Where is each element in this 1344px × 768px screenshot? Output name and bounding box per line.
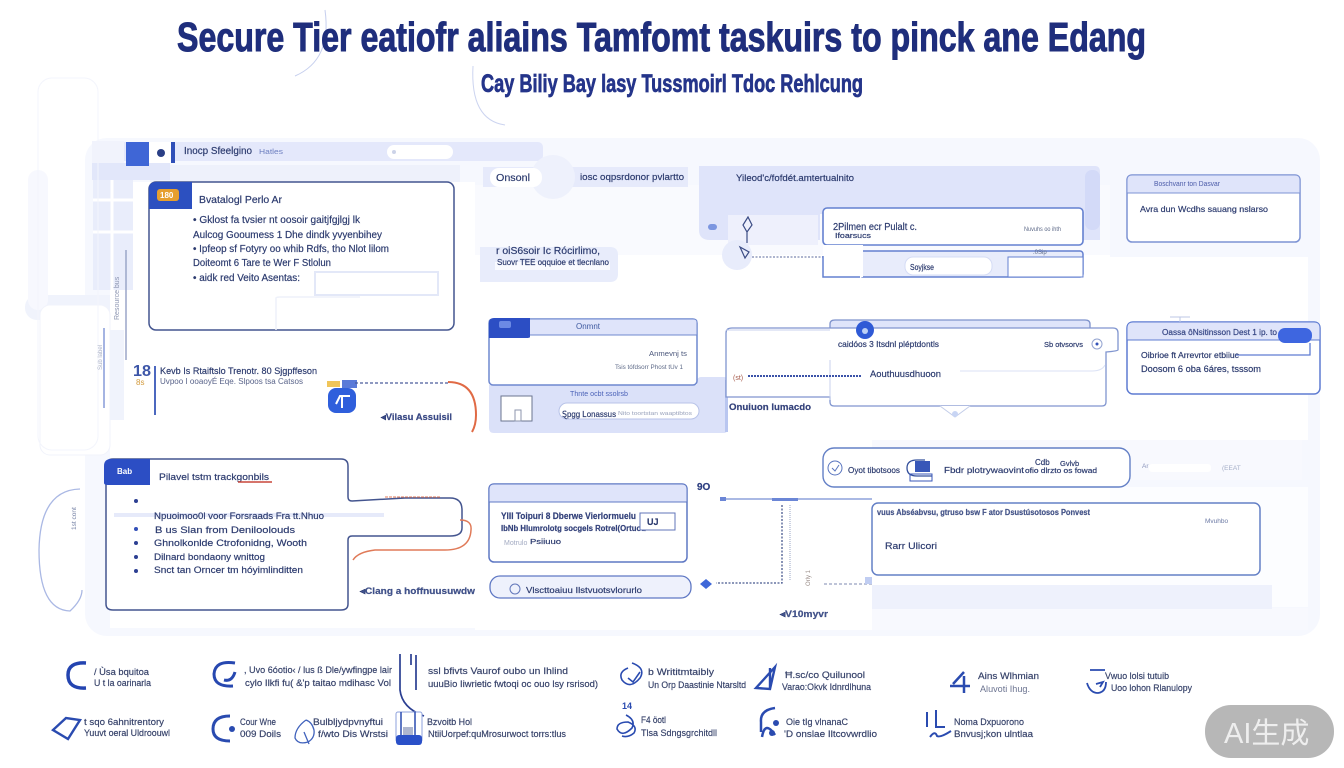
label: center text: Onuiuon Iumacdo [729,402,811,413]
legend text 12: F4 öotl [641,715,666,726]
legend text 13 [784,717,877,740]
top toolbar: Hatles [259,149,284,156]
callout: numbered note [133,363,317,415]
pill: lower center: Vlscttoaiuu Ilstvuotsvlorurlo [526,585,642,595]
pill: center right: Cdb [1035,458,1050,467]
panel: upper left card [149,182,454,330]
center top band: Onsonl [496,172,530,184]
panel: top far right card [1127,175,1300,242]
pill: center right: Fbdr plotrywaovint [944,465,1025,475]
panel: lower right wide card: Rarr Ulicori [885,541,937,552]
panel: lower left card: Npuoimoo0l voor Forsraads Fra tt.Nhuo [154,511,324,522]
legend text 9 [240,717,281,740]
legend text 11 [427,717,566,740]
pill: center right: ofio dlrzto os fowad [1025,468,1097,475]
note: left center [480,246,618,282]
panel: lower left card [104,459,462,610]
panel: upper left card: Aulcog Gooumess 1 Dhe dindk yvyenbihey [193,230,382,241]
legend text 14: Noma Dxpuorono [954,717,1024,728]
watermark badge [1205,705,1334,758]
legend text 3: ssl bfivts Vaurof oubo un Ihlind [428,666,568,677]
callout: numbered note: Kevb Is Rtaiftslo Trenotr. 80 Sjgpffeson [160,366,317,377]
legend text 13: Oie tIg vlnanaC [786,717,848,728]
panel: upper left card: • aidk red Veito Asentas: [193,273,300,284]
connector: orange curve [353,520,471,560]
icon: legend tube [396,712,422,745]
panel: top right inner card [823,208,1083,277]
icon: legend long funnel [400,654,424,716]
panel: lower center left card: Psiiuuo [530,537,561,546]
panel: lower right wide card: vuus Abséabvsu, gtruso bsw F ator Dsustúsotosos Ponvest [877,508,1090,517]
panel: lower center left card: Ylll Toipuri 8 Dberwe Vierlormuelu [501,511,636,521]
panel: right mid card [1127,317,1320,394]
icon: legend cup [1087,670,1106,693]
legend text 7: Vwuo lolsi tutuib [1105,671,1169,682]
top toolbar: Inocp Sfeelgino [184,146,252,157]
legend text 14 [954,717,1034,740]
pill: center right: Gvlvb [1060,459,1079,468]
icon: legend C dot [213,716,235,741]
icon: legend spiral: 14 [622,701,632,711]
panel: upper left card: • Ipfeop sf Fotyry oo whib Rdfs, tho Nlot lilom [193,244,389,255]
legend text 8: t sqo 6ahnitrentory [84,717,164,728]
panel: center small card: Onmnt [576,322,601,331]
legend text 8 [84,717,170,739]
panel: lower center left card: UJ [647,517,659,527]
legend text 7: Uoo lohon Rlanulopy [1111,683,1192,694]
panel: lower left card: Pilavel tstm trackgonbils [159,472,269,483]
text: U t la oarinarla [94,678,152,689]
note: left center: Suovr TEE oqquioe et tlecnlano [497,257,609,267]
connector: lower center dashed: Orly 1 [806,569,812,586]
icon: legend C [68,663,86,688]
vertical side labels: Sub label [98,345,104,370]
panel: lavender top right group [699,166,1100,245]
legend text 5: Varao:Okvk Idnrdlhuna [782,682,872,693]
pill: center right: (EEAT [1222,465,1241,472]
legend text 3 [428,666,598,690]
legend text 11: NtiiUorpef:quMrosurwoct torrs:tlus [428,729,566,740]
panel: lower left card: Dilnard bondaony wnittog [154,552,265,563]
panel: center flow card [726,320,1118,417]
icon: legend four [950,672,970,693]
legend text 10: f/wto Dis Wrstsi [318,729,388,740]
left oval tag: 1st cont [71,507,78,530]
panel: center flow card: caidóos 3 Itsdnl pléptdontls [838,339,939,349]
subtitle: Cay Biliy Bay lasy Tussmoirl Tdoc Rehlcung [481,70,863,98]
legend text 14: Bnvusj;kon ulntlaa [954,729,1034,740]
vertical side labels [98,250,126,408]
panel: upper left card: Bvatalogl Perlo Ar [199,195,283,206]
legend text 1: / Ùsa bquitoa [94,667,150,678]
panel: lower center left card [489,484,687,562]
panel: top far right card: Avra dun Wcdhs sauang nslarso [1140,204,1268,214]
legend text 6 [978,671,1039,695]
center top band [483,155,688,199]
panel: lavender top right group: Yileod'c/fofdét.amtertualnito [736,173,854,184]
icon: legend knot [621,663,642,685]
panel: center small card: Thnte ocbt ssolrsb [570,389,628,398]
center top band: iosc oqpsrdonor pvlartto [580,172,684,183]
legend text 11: Bzvoitb Hol [427,717,472,728]
pill: center right [823,448,1241,487]
pill: center right: Oyot tibotsoos [848,465,900,475]
legend text 4: b Writitmtaibly [648,667,714,678]
panel: lower center left card: IbNb Hlumrolotg socgels Rotrel(Ortuou [501,524,646,533]
legend text 10: Bulbljydpvnyftui [313,717,383,728]
legend text 2: cylo Ilkfi fu( &'p taitao mdihasc Vol [245,678,391,689]
panel: center small card: Ȿpgg Lonassus [562,409,616,420]
legend text 10 [313,717,388,740]
connector: lower center dashed [697,482,872,589]
label: lower center arrow: ◂V10myvr [779,609,828,620]
pill: lower center [490,576,691,598]
callout: numbered note: 18 [133,363,151,380]
icon: legend spiral [617,701,635,737]
panel: center small card [489,318,728,433]
legend text 4 [648,667,746,691]
panel: top right inner card: Soyjkse [910,263,934,272]
panel: center small card: Anmevnj ts [649,349,687,358]
panel: lower center left card: Motrulo [504,540,527,547]
label: lower left arrow text: ◂Clang a hoffnuusuwdw [359,586,476,597]
callout: numbered note: Uvpoo I ooaoyÉ Eqe. Slpoos tsa Catsos [160,377,303,386]
panel: upper left card: • Gklost fa tvsier nt oosoir gaitjfgjlgj lk [193,215,361,226]
icon: legend bars [927,710,951,737]
legend text 12 [641,715,717,739]
panel: top right inner card: Nuvuhs oo ihth [1024,227,1061,233]
legend text 2 [244,665,392,689]
legend text 13: 'D onslae Iltcovwrdlio [784,729,877,740]
label: left arrow text: ◂Vilasu Assuisil [380,412,452,423]
legend text 3: uuuBio Iiwrietic fwtoqi oc ouo lsy rsrisod) [428,679,598,690]
panel: right mid card: Doosom 6 oba 6áres, tsssom [1141,364,1261,374]
panel: upper left card: Doiteomt 6 Tare te Wer F Stlolun [193,258,331,269]
panel: upper left card: 180 [160,191,174,200]
panel: lower left card: Bab [117,467,132,476]
panel: lower left card: Snct tan Orncer tm hóyimlinditten [154,565,303,576]
pill: center right: Ar [1142,463,1149,470]
panel: top right inner card: 2Pilmen ecr Pulalt c. [833,222,917,233]
panel: lower left card: B us Slan from Deniloolouds [155,525,295,536]
legend row 1 [68,663,150,688]
panel: lower left card: Ghnolkonlde Ctrofonidng, Wooth [154,538,307,549]
panel: lower right wide card: Mvuhbo [1205,518,1229,525]
note: left center: r oiS6soir Ic Rócirlimo, [496,246,600,257]
panel: top right inner card: .0Sip [1033,250,1047,256]
watermark badge: AI生成 [1224,717,1309,750]
panel: center flow card: Sb otvsorvs [1044,340,1083,349]
icon: legend angular note [756,667,775,689]
panel: right mid card: Oassa ôNsitinsson Dest 1 ip. to [1162,328,1278,337]
icon: blue badge with connector [327,380,476,432]
legend text 6: Ains Wlhmian [978,671,1039,682]
legend text 5 [782,670,872,693]
panel: right mid card: Oibrioe ft Arrevrtor etbiiuc [1141,350,1240,360]
legend text 8: Yuuvt oeral Uldroouwl [84,728,170,739]
panel: center small card: Nito toortstan waaptibtos [618,411,692,417]
panel: center flow card: Aouthuusdhuoon [870,369,941,380]
icon: legend folded card [53,718,80,739]
legend text 7 [1105,671,1192,694]
panel: top far right card: Boschvanr ton Dasvar [1154,181,1221,188]
panel: center small card: Tsis tófdsorr Phost tUv 1 [615,364,683,371]
icon: legend hook [214,662,235,686]
icon: pen with dashed line [722,217,850,270]
connector: lower center dashed: 9O [697,482,711,493]
legend text 6: Aluvoti Ihug. [980,684,1030,695]
panel: top right inner card: Ifoarsucs [835,231,871,240]
legend text 9: Cour Wne [240,717,276,728]
legend text 5: Ħ.sc/co Quilunool [785,670,865,681]
legend text 12: Tlsa Sdngsgrchitdll [641,728,717,739]
callout: numbered note: 8s [136,378,144,387]
left oval tag [39,489,82,611]
connector: dashed red [385,496,440,498]
legend text 2: , Uvo 6óotio‹ / lus ß Dle/ywfingpe lair [244,665,392,676]
legend text 9: 009 Doils [240,729,281,740]
legend text 4: Un Orp Daastinie Ntarsltd [648,680,746,691]
vertical side labels: Resource bus [114,276,121,320]
icon: legend bracket dots [761,708,779,737]
icon: legend blob [295,720,314,744]
top toolbar [92,141,543,166]
panel: lower right wide card [872,503,1260,575]
panel: center flow card: (st) [733,375,743,382]
